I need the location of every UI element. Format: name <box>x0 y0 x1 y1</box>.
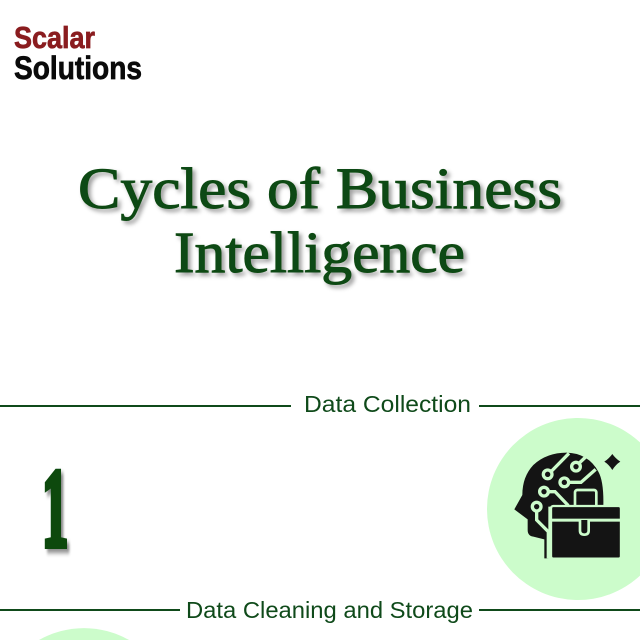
section heading: Data Collection: Data Collection <box>304 391 471 417</box>
briefcase handle <box>575 490 596 509</box>
section heading: Data Cleaning and Storage: Data Cleaning and Storage <box>186 597 473 623</box>
head silhouette <box>514 453 603 558</box>
icon background circle <box>487 418 640 600</box>
briefcase <box>551 506 621 559</box>
sparkle <box>604 454 620 470</box>
title: Intelligence <box>174 220 465 285</box>
logo: Scalar Solutions: Solutions <box>14 50 142 86</box>
title: Cycles of Business <box>78 156 562 221</box>
next icon circle <box>39 628 129 640</box>
logo: Scalar Solutions: Scalar <box>14 20 95 55</box>
icon glyph <box>514 453 621 559</box>
step number 1: 1 <box>42 446 68 570</box>
logo: Scalar Solutions <box>14 20 142 86</box>
title <box>78 156 562 285</box>
icon: head with circuits and briefcase <box>487 418 640 600</box>
circuit lines <box>532 453 596 558</box>
